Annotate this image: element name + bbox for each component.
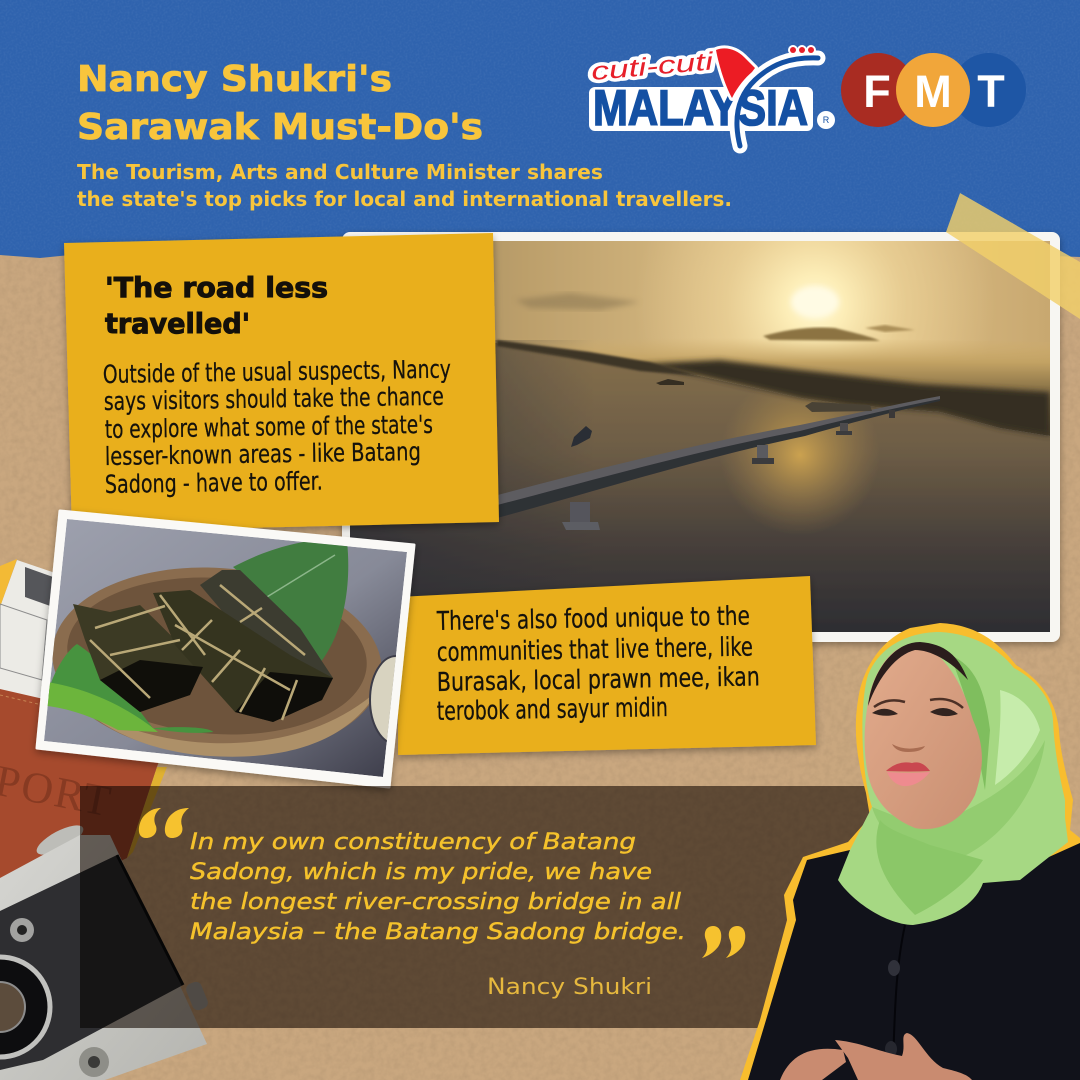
attribution: Nancy Shukri	[487, 974, 652, 1000]
title	[77, 59, 483, 148]
subtitle: The Tourism, Arts and Culture Minister shares	[77, 160, 603, 184]
logo: FMT: M	[914, 66, 952, 117]
photo: Burasak on woven basket	[37, 511, 422, 787]
note body	[103, 355, 451, 499]
icon: opening quote mark	[139, 808, 189, 838]
note body	[436, 602, 760, 727]
note heading: travelled'	[105, 307, 250, 340]
note: local food	[398, 576, 816, 755]
quote text: In my own constituency of Batang	[190, 829, 636, 855]
quote text: Sadong, which is my pride, we have	[190, 859, 652, 885]
logo: Cuti-Cuti Malaysia: cuti-cuti	[590, 47, 716, 86]
logo: FMT: F	[863, 66, 891, 117]
logo: Cuti-Cuti Malaysia: R	[823, 115, 830, 125]
rice rolls in leaf	[73, 570, 333, 722]
yellow cut-out outline	[740, 623, 1080, 1080]
icon: closing quote mark	[702, 926, 745, 958]
washi tape	[946, 193, 1080, 319]
note body: to explore what some of the state's	[105, 410, 433, 444]
note heading: 'The road less	[105, 271, 328, 304]
subtitle: the state's top picks for local and international travellers.	[77, 187, 732, 211]
black jacket	[748, 843, 1080, 1080]
note body: says visitors should take the chance	[104, 382, 444, 416]
logo: FMT	[841, 53, 1026, 127]
note body: terobok and sayur midin	[437, 693, 668, 727]
green hijab	[838, 632, 1068, 925]
hands	[780, 1033, 972, 1080]
portrait: Nancy Shukri	[740, 623, 1080, 1080]
note body: Burasak, local prawn mee, ikan	[437, 662, 760, 698]
quote text	[190, 829, 686, 945]
logo: FMT: T	[977, 66, 1005, 117]
note body: Sadong - have to offer.	[105, 467, 323, 499]
sunset sky	[493, 241, 1050, 361]
banana leaf	[47, 540, 348, 733]
boats	[571, 379, 684, 447]
quote panel	[80, 786, 880, 1028]
boarding pass and passport	[0, 559, 170, 915]
title: Sarawak Must-Do's	[77, 107, 483, 148]
header: blue torn paper	[0, 0, 1080, 258]
note: the road less travelled	[64, 233, 499, 532]
bridge	[490, 396, 940, 530]
camera	[0, 820, 210, 1080]
quote text: Malaysia – the Batang Sadong bridge.	[190, 919, 686, 945]
photo: Batang Sadong bridge at sunset	[342, 232, 1060, 642]
bowl	[369, 655, 396, 742]
note body: lesser-known areas - like Batang	[105, 437, 421, 471]
logo: Cuti-Cuti Malaysia: MALAYSIA	[593, 80, 808, 136]
logo: Cuti-Cuti Malaysia	[589, 47, 835, 146]
quote text: the longest river-crossing bridge in all	[190, 889, 682, 915]
face	[865, 642, 982, 829]
river	[350, 343, 1050, 632]
note body: There's also food unique to the	[436, 602, 750, 637]
note body: communities that live there, like	[437, 632, 753, 668]
note heading	[105, 271, 328, 340]
subtitle	[77, 160, 732, 211]
woven basket	[52, 568, 382, 757]
note body: Outside of the usual suspects, Nancy	[103, 355, 451, 389]
far river bank	[497, 338, 1050, 436]
title: Nancy Shukri's	[77, 59, 392, 100]
